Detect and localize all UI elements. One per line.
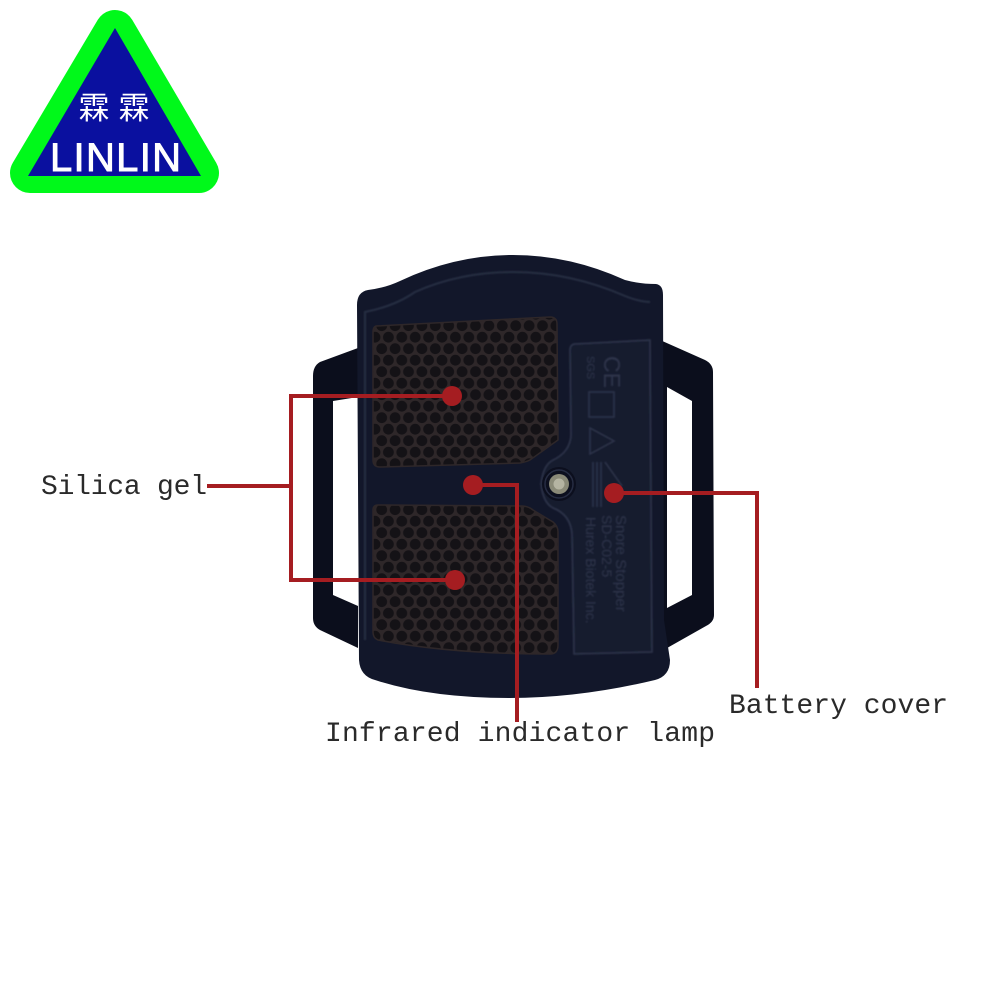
screw <box>542 467 576 501</box>
battery cover markings: Snore Stopper <box>612 515 629 612</box>
label: Infrared indicator lamp: Infrared indicator lamp <box>325 719 715 750</box>
battery cover markings: Hurex Biotek Inc. <box>583 517 599 624</box>
label: Battery cover: Battery cover <box>729 691 948 722</box>
upper silica pad <box>373 317 558 467</box>
battery cover panel <box>541 340 652 654</box>
label: Silica gel: Silica gel <box>41 472 207 503</box>
lower silica pad <box>373 505 558 654</box>
logo: LINLIN wordmark: LINLIN <box>50 136 181 180</box>
logo: LINLIN triangle <box>28 28 201 180</box>
callout lines: silica gel <box>207 396 455 580</box>
battery cover markings: CE <box>599 356 625 388</box>
battery cover markings: SGS <box>584 356 596 379</box>
device body <box>357 255 670 698</box>
callout line: battery cover <box>614 493 757 688</box>
left strap <box>313 348 358 648</box>
body highlight ridge <box>365 272 650 640</box>
callout dot: infrared lamp <box>463 475 483 495</box>
callout dot: lower silica gel <box>445 570 465 590</box>
callout line: infrared lamp <box>473 485 517 722</box>
device: snore stopper <box>313 255 714 698</box>
callout dot: battery cover <box>604 483 624 503</box>
battery cover markings: SD-C02-5 <box>599 515 615 577</box>
logo: Chinese name: 霖 霖 <box>78 91 150 126</box>
right strap <box>660 340 714 652</box>
callout dot: upper silica gel <box>442 386 462 406</box>
battery cover markings <box>583 356 629 624</box>
